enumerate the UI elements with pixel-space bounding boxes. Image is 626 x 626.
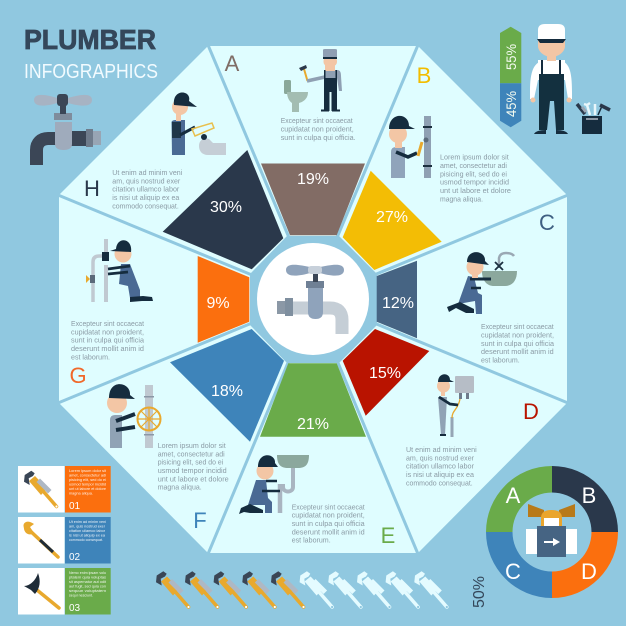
text block H: citation ullamco labor	[112, 185, 180, 194]
donut chart	[486, 466, 618, 598]
segment: E 21%	[260, 363, 366, 437]
icon: valve	[526, 504, 577, 557]
text block A: Excepteur sint occaecat	[281, 116, 353, 125]
text block H: commodo consequat.	[112, 201, 179, 210]
segment: B 27%	[343, 171, 442, 270]
segment: C 12%	[377, 261, 417, 338]
text block E: est laborum.	[292, 536, 331, 545]
donut chart: B	[582, 483, 596, 508]
text block B: amet, consectetur adi	[440, 161, 507, 170]
text block B	[440, 152, 511, 203]
text block C: deserunt mollit anim id	[481, 347, 554, 356]
label A: A	[225, 51, 240, 76]
text block B: magna aliqua.	[440, 194, 483, 203]
segment: B 27%: 27%	[376, 209, 408, 226]
text block F: Lorem ipsum dolor sit	[158, 441, 227, 450]
ribbon: 55% / 45%	[500, 27, 521, 127]
text block C	[481, 322, 555, 364]
text block E: deserunt mollit anim id	[292, 527, 365, 536]
segment: D 15%	[343, 329, 429, 416]
card 03 text: sit aspernatur aut odit	[69, 580, 106, 584]
card 02 text: citation ullamco labor	[69, 529, 106, 533]
segment: G 9%: 9%	[206, 295, 230, 312]
text block H	[112, 168, 183, 210]
text block F: amet, consectetur adi	[158, 449, 225, 458]
card 01 number: 01	[69, 501, 81, 512]
label E: E	[381, 523, 395, 548]
donut chart: A	[506, 483, 521, 508]
segment: H 30%	[163, 150, 283, 269]
segment: H 30%: 30%	[210, 199, 242, 216]
ribbon: 55% / 45%: 45%	[503, 91, 519, 117]
segment: F 18%	[170, 329, 284, 442]
text block D	[406, 445, 477, 488]
card 03 text: ptatem quia voluptas	[69, 576, 106, 580]
text block C: sunt in culpa qui officia	[481, 339, 555, 348]
card 03	[18, 568, 111, 614]
text block G: Excepteur sint occaecat	[71, 319, 145, 328]
label G: G	[69, 363, 87, 388]
card 01 text: unt ut labore et dolore	[69, 487, 106, 491]
label C: C	[539, 210, 555, 235]
card 02 number: 02	[69, 552, 81, 563]
worker A with toilet	[284, 49, 342, 112]
ribbon: 55% / 45%: 55%	[503, 44, 519, 70]
card 03 number: 03	[69, 603, 81, 614]
card 01 text	[69, 469, 106, 496]
label D: D	[523, 399, 539, 424]
text block H: is nisi ut aliquip ex ea	[112, 193, 180, 202]
segment: A 19%: 19%	[297, 171, 329, 188]
segment: F 18%: 18%	[211, 383, 243, 400]
text block D: commodo consequat.	[406, 478, 473, 488]
card 01 text: pisicing elit, sed do ei	[69, 478, 106, 482]
text block D: am, quis nostrud exer	[406, 453, 474, 462]
text block C: Excepteur sint occaecat	[481, 322, 554, 331]
worker D with boiler	[437, 374, 474, 437]
text block E: sunt in culpa qui officia	[292, 519, 365, 528]
donut chart: C	[505, 559, 521, 584]
text block A: cupidatat non proident,	[281, 124, 354, 134]
worker standing	[530, 24, 572, 134]
worker F with valve wheel	[107, 384, 160, 448]
text block G: deserunt mollit anim id	[71, 344, 144, 353]
text block D: Ut enim ad minim veni	[406, 445, 477, 454]
card 01 wrench	[24, 471, 58, 508]
text block G: cupidatat non proident,	[71, 327, 144, 336]
text block F: magna aliqua.	[158, 483, 202, 492]
text block B: pisicing elit, sed do ei	[440, 169, 507, 178]
segment: A 19%	[261, 164, 365, 235]
text block G	[71, 319, 145, 361]
label B: B	[417, 63, 431, 88]
text block B: Lorem ipsum dolor sit	[440, 152, 510, 162]
card 03 text: aut fugit, sed quia con	[69, 584, 106, 588]
text block B: unt ut labore et dolore	[440, 186, 511, 195]
card 02 text: commodo consequat.	[69, 538, 103, 542]
center hub	[250, 236, 377, 363]
text block E	[292, 502, 366, 545]
card 02	[18, 517, 111, 564]
text block G: est laborum.	[71, 352, 110, 361]
segment: C 12%: 12%	[382, 295, 414, 312]
text block F: usmod tempor incidid	[158, 466, 227, 475]
panel: octagon	[59, 46, 567, 553]
subtitle: INFOGRAPHICS	[24, 60, 158, 83]
text block B: usmod tempor incidid	[440, 178, 509, 187]
segment: D 15%: 15%	[369, 365, 401, 382]
row value 50%: 50%	[471, 576, 488, 608]
text block G: sunt in culpa qui officia	[71, 336, 145, 345]
text block D: citation ullamco labor	[406, 462, 474, 471]
card 03 text	[69, 571, 106, 598]
card 02 text: Ut enim ad minim veni	[69, 520, 106, 524]
title: PLUMBER	[24, 24, 156, 55]
card 01	[18, 466, 111, 512]
card 02 text: is nisi ut aliquip ex ea	[69, 534, 106, 538]
segment: E 21%: 21%	[297, 416, 329, 433]
text block H: Ut enim ad minim veni	[112, 168, 183, 177]
text block C: est laborum.	[481, 356, 520, 364]
icon: toolbox	[577, 103, 610, 134]
text block E: cupidatat non proident,	[292, 511, 365, 520]
text block F: pisicing elit, sed do ei	[158, 458, 223, 467]
card 03 text: Nemo enim ipsam volu	[69, 571, 106, 575]
worker B with pipe	[389, 116, 432, 178]
label H: H	[84, 176, 100, 201]
worker G with pipes	[86, 239, 153, 302]
card 03 plunger	[24, 573, 59, 608]
center circle	[257, 243, 369, 355]
card 01 text: amet, consectetur adi	[69, 474, 106, 478]
worker C with sink	[447, 252, 517, 314]
card 02 text	[69, 520, 106, 542]
card 02 spanner	[24, 522, 58, 557]
card 03 text: sequun voluptatem	[69, 589, 106, 593]
donut chart: D	[581, 559, 597, 584]
panel separators	[58, 45, 568, 554]
wrench pictogram row	[156, 571, 448, 608]
card 01 text: usmod tempor incidid	[69, 482, 106, 486]
text block A	[281, 116, 356, 142]
text block C: cupidatat non proident,	[481, 330, 554, 339]
card 01 text: magna aliqua.	[69, 492, 93, 496]
text block A: sunt in culpa qui officia.	[281, 133, 356, 142]
text block F: unt ut labore et dolore	[158, 474, 229, 483]
icon: large faucet	[34, 94, 101, 165]
label F: F	[193, 508, 207, 533]
icon: center faucet	[277, 265, 344, 334]
text block H: am, quis nostrud exer	[112, 176, 181, 185]
card 01 text: Lorem ipsum dolor sit	[69, 469, 106, 473]
segment: G 9%	[198, 256, 249, 343]
text block E: Excepteur sint occaecat	[292, 502, 366, 511]
text block F	[158, 441, 229, 492]
worker H with pipe saw	[172, 92, 226, 155]
card 03 text: sequi nesciunt.	[69, 594, 93, 598]
card 02 text: am, quis nostrud exer	[69, 524, 106, 528]
worker E with sink pipe	[239, 455, 309, 514]
text block D: is nisi ut aliquip ex ea	[406, 470, 475, 479]
